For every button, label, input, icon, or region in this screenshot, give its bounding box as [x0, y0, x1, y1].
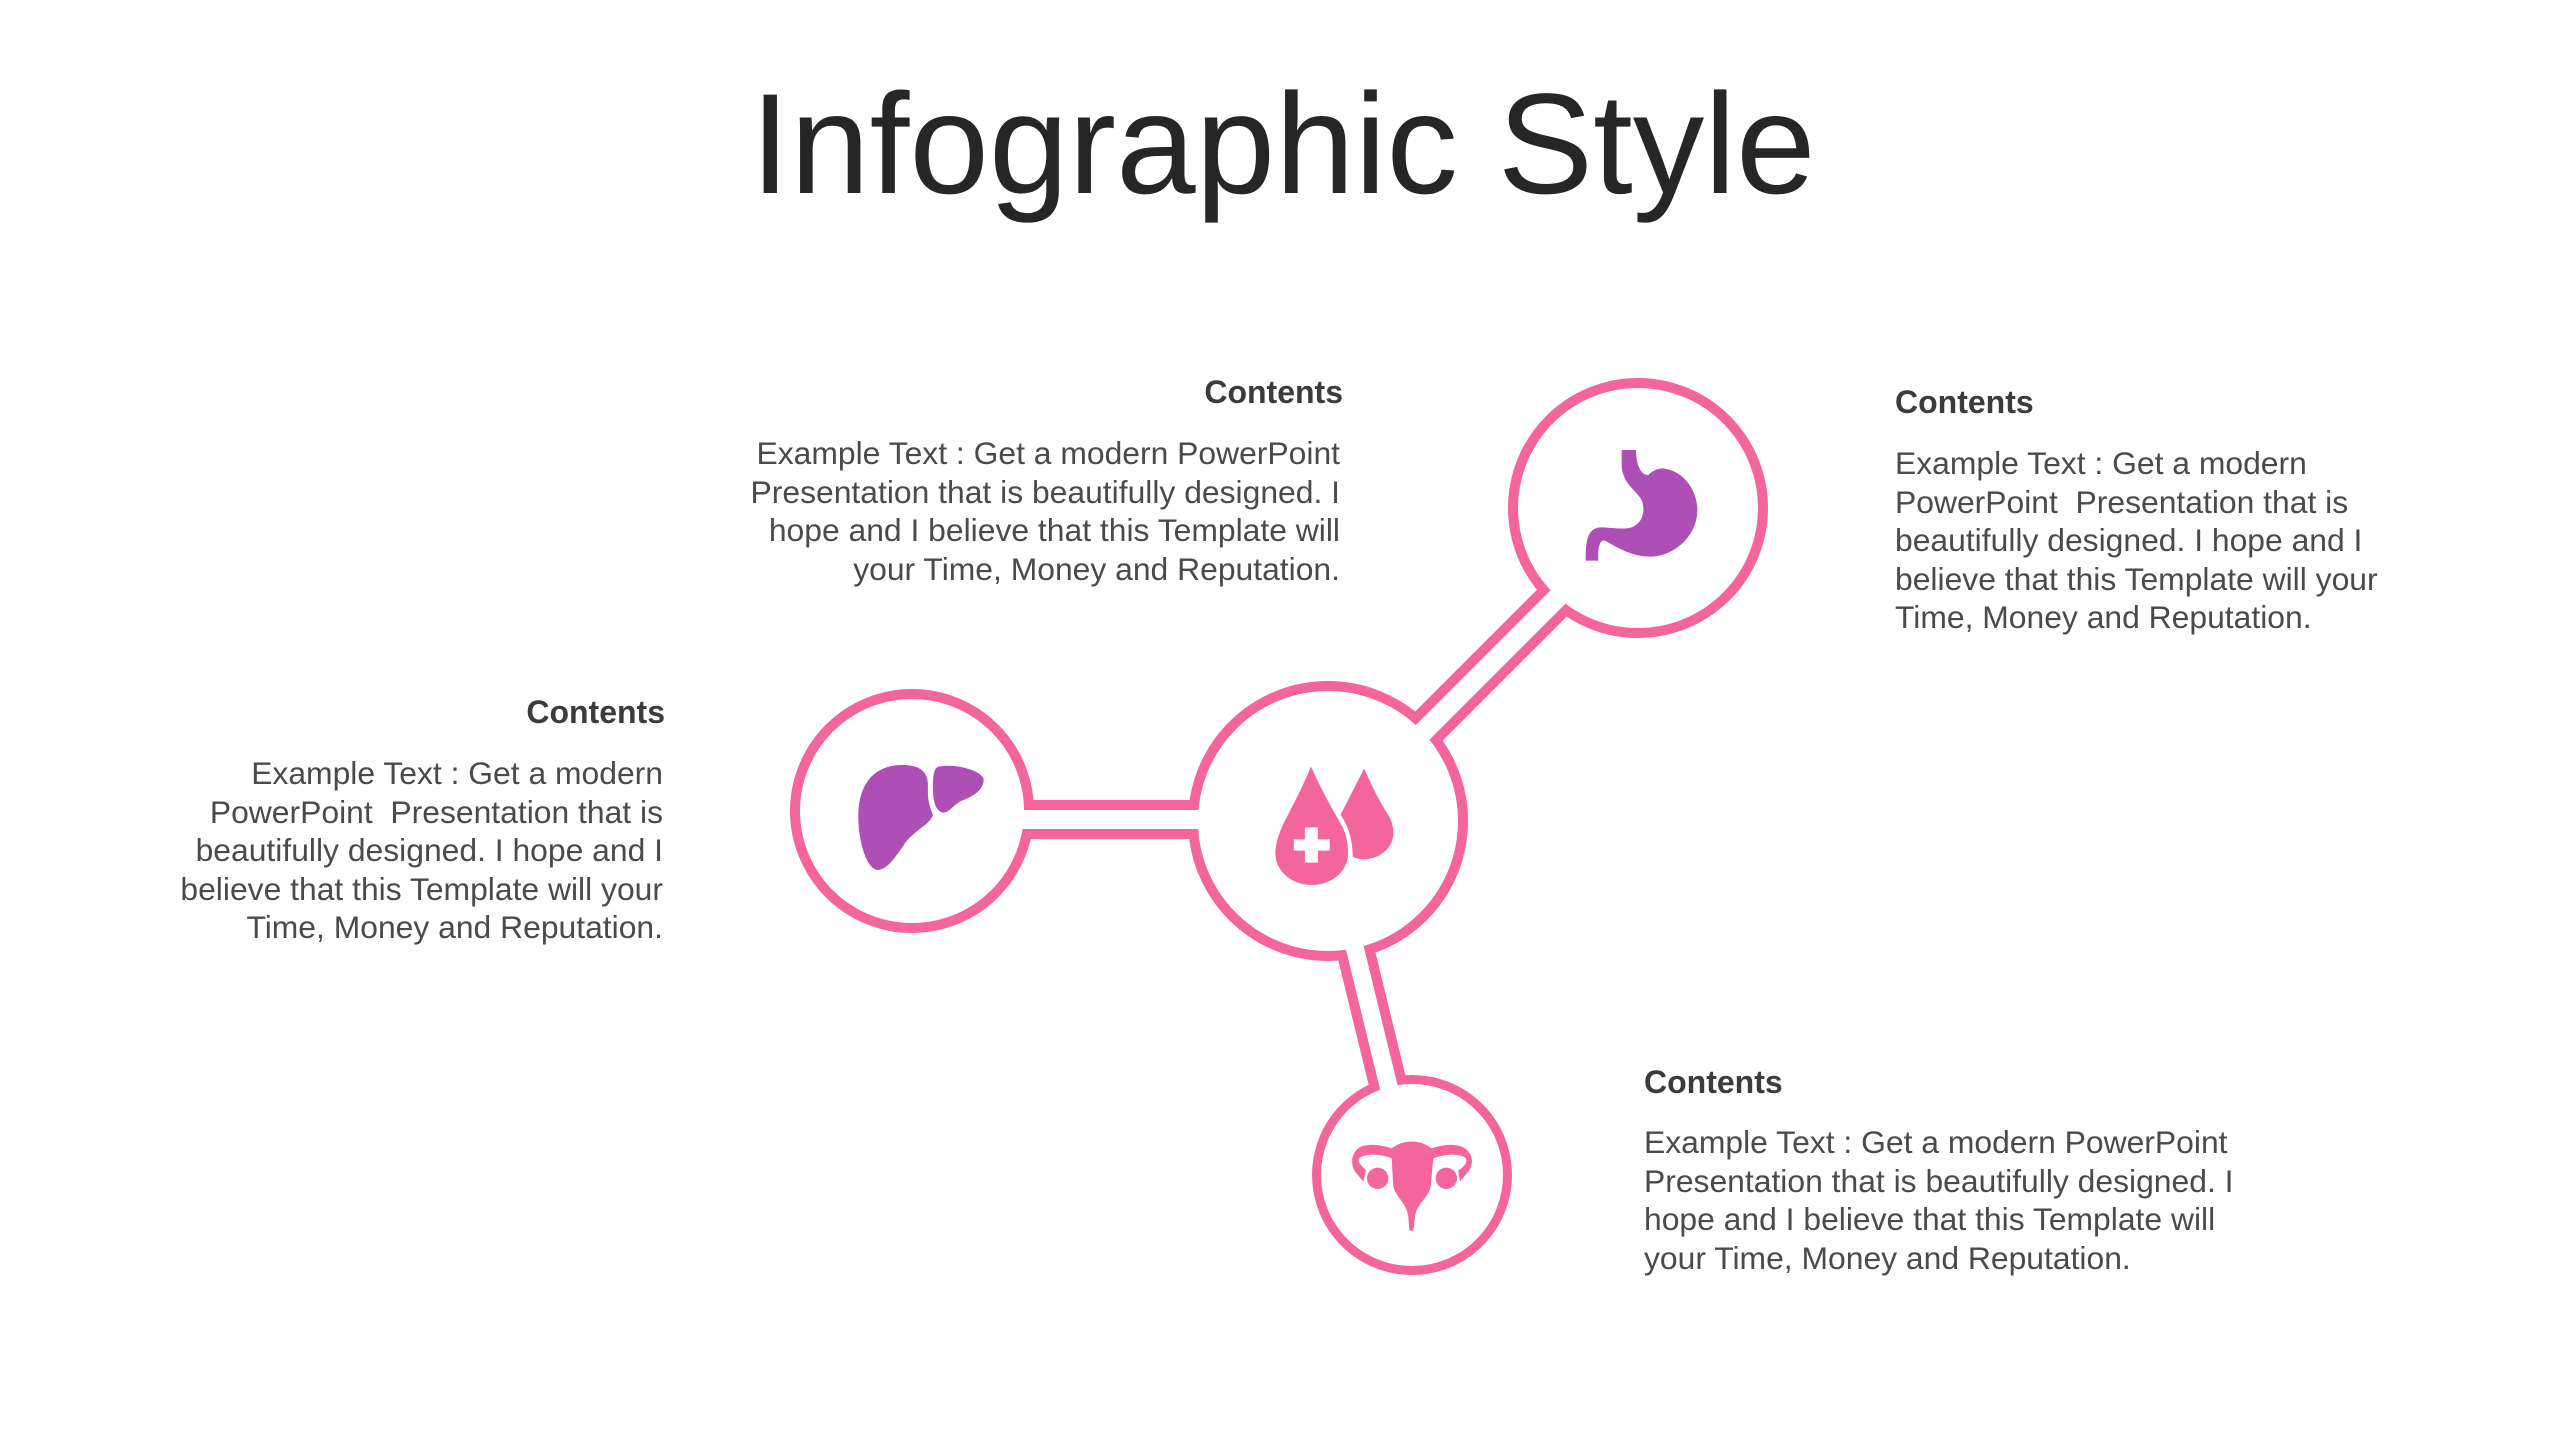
text block: top right: believe that this Template will your	[1895, 561, 2378, 597]
text block: top center: Presentation that is beautifully designed. I	[751, 474, 1340, 510]
connector: center to stomach	[1340, 525, 1630, 815]
connector gap: stomach	[1340, 525, 1630, 815]
icon: liver	[858, 765, 984, 870]
circle: stomach	[1513, 383, 1763, 633]
text block: top right: Example Text : Get a modern	[1895, 445, 2307, 481]
text block: left: Time, Money and Reputation.	[246, 909, 663, 945]
text block: left: beautifully designed. I hope and I	[196, 832, 663, 868]
connector gap: uterus	[1326, 830, 1409, 1170]
circle: blood center	[1193, 686, 1463, 956]
text block: bottom right: Presentation that is beautifully designed. I	[1644, 1163, 2233, 1199]
text block: top center: hope and I believe that this Template will	[769, 512, 1340, 548]
text block: bottom right: Example Text : Get a modern PowerPoint	[1644, 1124, 2228, 1160]
icon: uterus	[1352, 1142, 1472, 1231]
text block: top right: PowerPoint Presentation that is	[1895, 484, 2348, 520]
text block: left: believe that this Template will your	[180, 871, 663, 907]
connector: center to liver	[912, 800, 1328, 839]
text block: left: PowerPoint Presentation that is	[210, 794, 663, 830]
icon: blood drops	[1275, 767, 1393, 885]
text block: left: Contents	[526, 694, 665, 730]
text block: top center: Contents	[1204, 374, 1343, 410]
icon: stomach	[1586, 450, 1697, 561]
text block: bottom right	[1644, 1064, 2233, 1276]
text block: top center: Example Text : Get a modern PowerPoint	[756, 435, 1340, 471]
circle: liver	[795, 694, 1029, 928]
connector gap: liver	[912, 810, 1328, 829]
text block: top center: your Time, Money and Reputation.	[853, 551, 1340, 587]
text block: left	[180, 694, 665, 945]
text block: top right	[1895, 384, 2378, 635]
circle: uterus	[1316, 1080, 1508, 1270]
text block: top right: beautifully designed. I hope and I	[1895, 522, 2362, 558]
text block: bottom right: Contents	[1644, 1064, 1783, 1100]
text block: bottom right: your Time, Money and Reputation.	[1644, 1240, 2131, 1276]
connector: center to uterus	[1326, 830, 1409, 1170]
text block: top center	[751, 374, 1343, 587]
text block: top right: Contents	[1895, 384, 2034, 420]
title: Infographic Style	[750, 65, 1816, 224]
text block: top right: Time, Money and Reputation.	[1895, 599, 2312, 635]
text block: left: Example Text : Get a modern	[251, 755, 663, 791]
text block: bottom right: hope and I believe that this Template will	[1644, 1201, 2215, 1237]
